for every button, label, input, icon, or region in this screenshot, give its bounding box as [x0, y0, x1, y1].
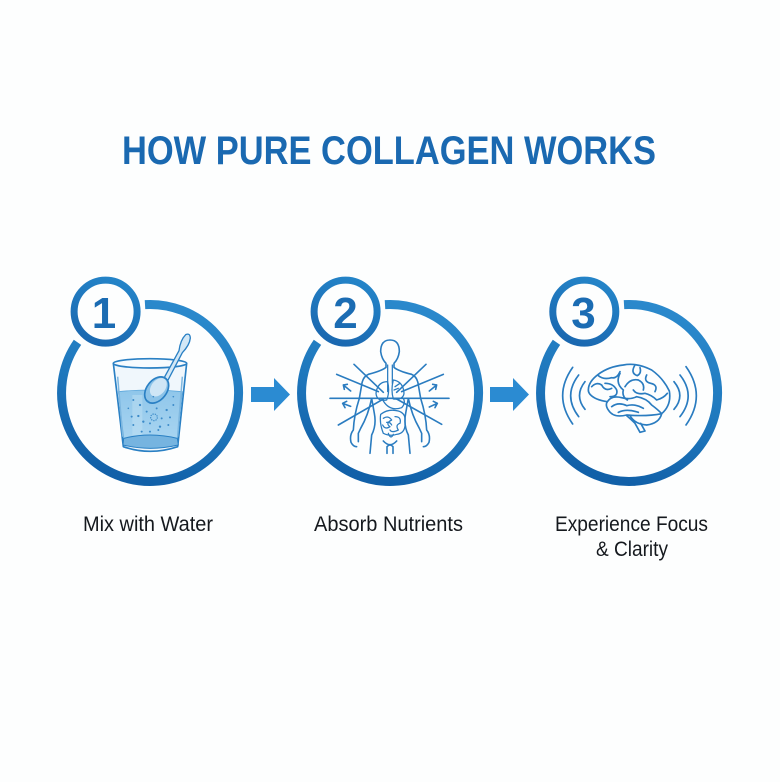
label: mix with water: Mix with Water	[83, 513, 213, 536]
spoon	[140, 334, 190, 408]
brain outline	[588, 364, 670, 416]
label: experience focus and clarity: & Clarity	[596, 538, 668, 561]
label: experience focus and clarity	[555, 513, 708, 561]
icon: signal waves	[563, 367, 696, 425]
cerebellum and brain stem	[627, 414, 662, 432]
ring 3	[541, 304, 718, 481]
body outline	[351, 340, 429, 453]
organs	[376, 365, 405, 437]
label: experience focus and clarity: Experience Focus	[555, 513, 708, 536]
badge 2	[314, 280, 377, 343]
badge 2: 2	[333, 289, 358, 338]
brain folds	[592, 365, 667, 400]
icon: human body with radiating arrows	[330, 340, 449, 453]
badge 1	[74, 280, 137, 343]
small arrows	[343, 384, 437, 408]
step 3: experience focus and clarity	[541, 280, 718, 481]
title: HOW PURE COLLAGEN WORKS	[122, 129, 656, 173]
icon: brain	[588, 364, 670, 432]
ring 1	[62, 304, 239, 481]
badge 3: 3	[571, 289, 596, 338]
badge 3	[553, 280, 616, 343]
badge 1: 1	[92, 289, 116, 338]
arrow 2 to 3	[490, 378, 529, 411]
ring 2	[302, 304, 479, 481]
radiating lines	[330, 364, 449, 425]
label: absorb nutrients: Absorb Nutrients	[314, 513, 463, 536]
arrow 1 to 2	[251, 378, 290, 411]
step 2: absorb nutrients	[302, 280, 479, 481]
step 1: mix with water	[62, 280, 239, 481]
bubbles and powder	[127, 396, 174, 433]
icon: glass of water with spoon	[113, 334, 190, 451]
